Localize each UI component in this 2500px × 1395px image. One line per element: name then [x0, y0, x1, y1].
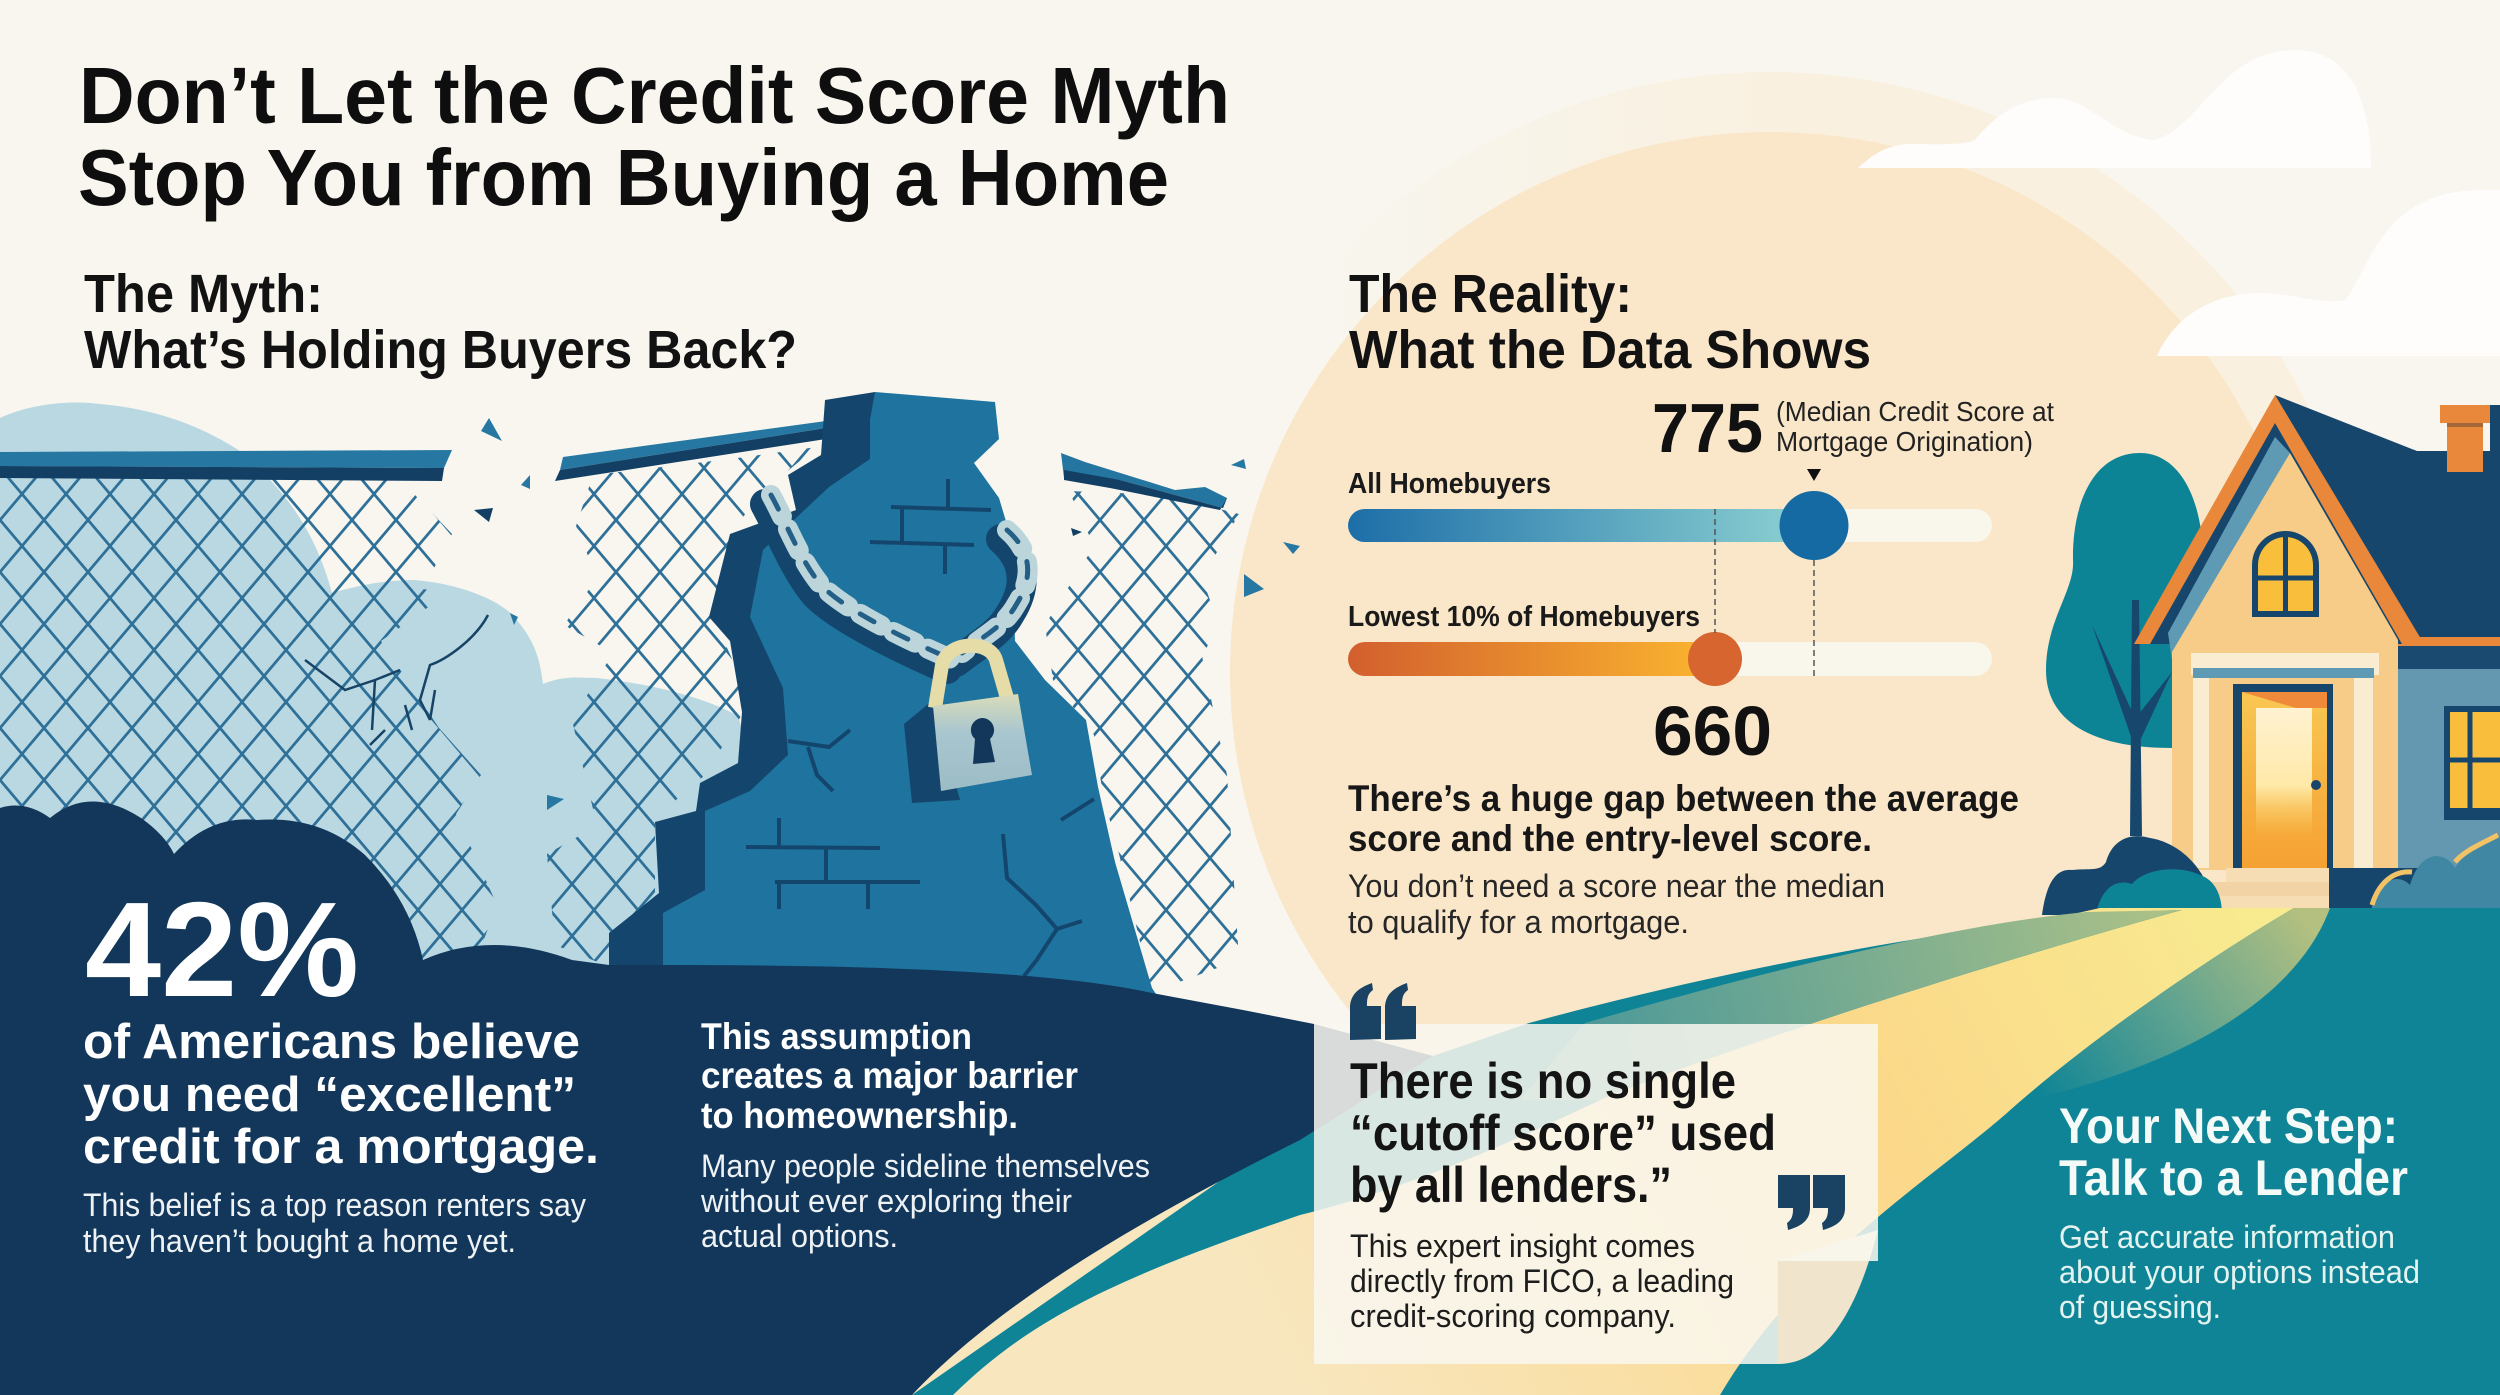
gap text — [1348, 778, 2019, 940]
myth heading: What’s Holding Buyers Back? — [84, 320, 797, 380]
flying fragments — [474, 418, 1300, 810]
gable inner — [2150, 423, 2402, 644]
bar all homebuyers — [1348, 491, 1992, 560]
median caption: Mortgage Origination) — [1776, 426, 2033, 457]
next step text: Talk to a Lender — [2059, 1150, 2408, 1206]
chimney — [2440, 405, 2490, 472]
steps — [2191, 868, 2329, 912]
reality heading — [1349, 264, 1871, 380]
quote headline: There is no single — [1350, 1053, 1736, 1109]
blue bushes with gold edge — [2371, 835, 2500, 912]
roof back strip — [2490, 405, 2500, 455]
barrier text: This assumption — [701, 1016, 972, 1057]
bricks and cracks — [746, 479, 1094, 976]
quote attribution — [1350, 1228, 1734, 1334]
broken pillar — [609, 392, 1160, 1000]
next step text: about your options instead — [2059, 1254, 2420, 1290]
teal bushes — [2096, 869, 2222, 915]
background hills — [0, 403, 820, 980]
gap text: There’s a huge gap between the average — [1348, 778, 2019, 819]
right teal lawn — [1720, 908, 2500, 1395]
quote card — [1314, 983, 1878, 1364]
teal left band — [912, 910, 2182, 1395]
quote attribution: credit-scoring company. — [1350, 1298, 1676, 1334]
marker triangle — [1807, 469, 1821, 481]
stat: 42 percent: This belief is a top reason renters say — [83, 1187, 586, 1223]
right wing — [2398, 644, 2500, 914]
quote headline — [1350, 1053, 1776, 1213]
pillar face — [663, 392, 1160, 1000]
barrier text: creates a major barrier — [701, 1055, 1078, 1096]
next step text: Your Next Step: — [2059, 1098, 2398, 1154]
stat: 42 percent: they haven’t bought a home yet. — [83, 1223, 516, 1259]
arched window — [2252, 531, 2319, 617]
fence top rails — [0, 421, 1227, 510]
door — [2233, 684, 2333, 868]
stat: 42 percent: of Americans believe — [83, 1015, 580, 1069]
tree trunk — [2092, 600, 2172, 836]
chain — [765, 495, 1028, 669]
lock shadow — [904, 700, 960, 803]
median caption — [1776, 396, 2054, 457]
keyhole — [971, 718, 995, 764]
title: Don’t Let the Credit Score Myth — [79, 51, 1230, 140]
label lowest ten percent: Lowest 10% of Homebuyers — [1348, 601, 1700, 633]
road — [880, 908, 2294, 1395]
card panel — [1314, 1024, 1878, 1364]
shackle — [935, 646, 1007, 708]
padlock — [904, 646, 1032, 803]
myth heading: The Myth: — [84, 264, 323, 324]
stat: 42 percent: credit for a mortgage. — [83, 1120, 599, 1174]
median value: 775 — [1652, 389, 1763, 467]
sun disc — [1230, 132, 2310, 1212]
next step text — [2059, 1098, 2420, 1325]
pillar shadow side — [609, 392, 950, 1000]
quote attribution: directly from FICO, a leading — [1350, 1263, 1734, 1299]
barrier text: Many people sideline themselves — [701, 1148, 1150, 1184]
quote headline: by all lenders.” — [1350, 1157, 1672, 1213]
stat: 42 percent: you need “excellent” — [83, 1068, 576, 1122]
chain-link fence — [0, 440, 1260, 1000]
close quote mark — [1778, 1175, 1845, 1230]
navy ground — [0, 802, 1433, 1395]
cloud upper — [1858, 50, 2371, 168]
title — [78, 51, 1230, 222]
reality heading: What the Data Shows — [1349, 320, 1871, 380]
stat: 42 percent — [83, 874, 599, 1259]
score comparison chart — [1348, 389, 2054, 770]
barrier text: actual options. — [701, 1218, 898, 1254]
reality heading: The Reality: — [1349, 264, 1632, 324]
eave — [2398, 637, 2500, 646]
cloud lower — [2157, 190, 2500, 356]
porch base — [2310, 868, 2418, 912]
open quote mark — [1350, 983, 1416, 1040]
barrier text: to homeownership. — [701, 1095, 1018, 1136]
entry value: 660 — [1653, 692, 1772, 770]
green left band — [1520, 910, 2182, 1100]
main roof — [2275, 395, 2500, 640]
quote headline: “cutoff score” used — [1350, 1105, 1776, 1161]
porch frame — [2191, 653, 2379, 868]
bar lowest ten percent — [1348, 632, 1992, 686]
median caption: (Median Credit Score at — [1776, 396, 2054, 427]
myth heading — [84, 264, 797, 380]
label all homebuyers: All Homebuyers — [1348, 468, 1551, 500]
lock body — [933, 694, 1032, 791]
right window — [2444, 706, 2500, 820]
navy bushes — [2042, 836, 2210, 915]
sun outer ring — [1170, 72, 2370, 1272]
house and tree group — [2042, 395, 2500, 915]
barrier text: without ever exploring their — [700, 1183, 1072, 1219]
tree foliage — [2046, 453, 2203, 748]
title: Stop You from Buying a Home — [78, 133, 1169, 222]
blue strip — [2168, 437, 2290, 660]
gap text: score and the entry-level score. — [1348, 818, 1872, 859]
dashed guides — [1715, 509, 1814, 676]
stat: 42 percent: 42% — [85, 874, 359, 1025]
gable wall — [2172, 453, 2398, 870]
green road edge — [2007, 908, 2330, 1113]
gap text: You don’t need a score near the median — [1348, 868, 1885, 904]
wall cracks on background — [305, 615, 488, 745]
card curl — [1778, 1230, 1878, 1364]
next step text: Get accurate information — [2059, 1219, 2395, 1255]
next step text: of guessing. — [2059, 1289, 2221, 1325]
gable orange trim — [2134, 395, 2424, 644]
barrier text — [700, 1016, 1150, 1254]
quote attribution: This expert insight comes — [1350, 1228, 1695, 1264]
gap text: to qualify for a mortgage. — [1348, 904, 1689, 940]
